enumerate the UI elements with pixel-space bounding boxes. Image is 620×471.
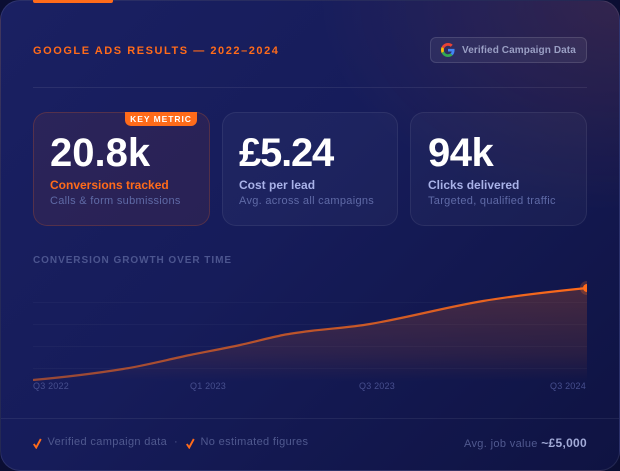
stat label: clicks: Clicks delivered <box>428 178 519 192</box>
key metric tag: KEY METRIC <box>130 114 192 124</box>
icon: check 1 <box>33 438 42 449</box>
icon: google G <box>441 43 455 57</box>
panel: cost stat <box>222 112 398 226</box>
stat label: conversions: Conversions tracked <box>50 178 169 192</box>
footer note: no estimates: No estimated figures <box>200 436 308 448</box>
stat note: cost: Avg. across all campaigns <box>239 195 374 207</box>
axis label: Q3 2022: Q3 2022 <box>33 380 69 390</box>
panel: clicks stat <box>410 112 587 226</box>
axis label: Q3 2023: Q3 2023 <box>359 380 395 390</box>
key metric tag <box>125 112 197 126</box>
stat value: 20.8k: 20.8k <box>50 130 150 174</box>
stat label: cost: Cost per lead <box>239 178 315 192</box>
panel: conversions stat <box>33 112 210 226</box>
axis label: Q3 2024: Q3 2024 <box>550 380 586 390</box>
icon: check 2 <box>186 438 195 449</box>
stat note: clicks: Targeted, qualified traffic <box>428 195 556 207</box>
stat value: £5.24: £5.24 <box>239 130 333 174</box>
top accent bar <box>33 0 113 3</box>
axis label: Q1 2023: Q1 2023 <box>190 380 226 390</box>
badge label: Verified Campaign Data <box>462 45 576 56</box>
stat note: conversions: Calls & form submissions <box>50 195 181 207</box>
footer divider <box>1 418 619 419</box>
chart heading: CONVERSION GROWTH OVER TIME <box>33 255 232 266</box>
footer separator: · <box>174 436 178 448</box>
stat value: 94k: 94k <box>428 130 493 174</box>
footer note: job value: Avg. job value ~£5,000 <box>464 436 587 450</box>
line chart: conversion growth <box>33 281 587 381</box>
header divider <box>33 87 587 88</box>
badge: verified campaign data <box>430 37 587 63</box>
footer note: verified: Verified campaign data <box>48 436 167 448</box>
heading: GOOGLE ADS RESULTS — 2022–2024 <box>33 44 279 56</box>
